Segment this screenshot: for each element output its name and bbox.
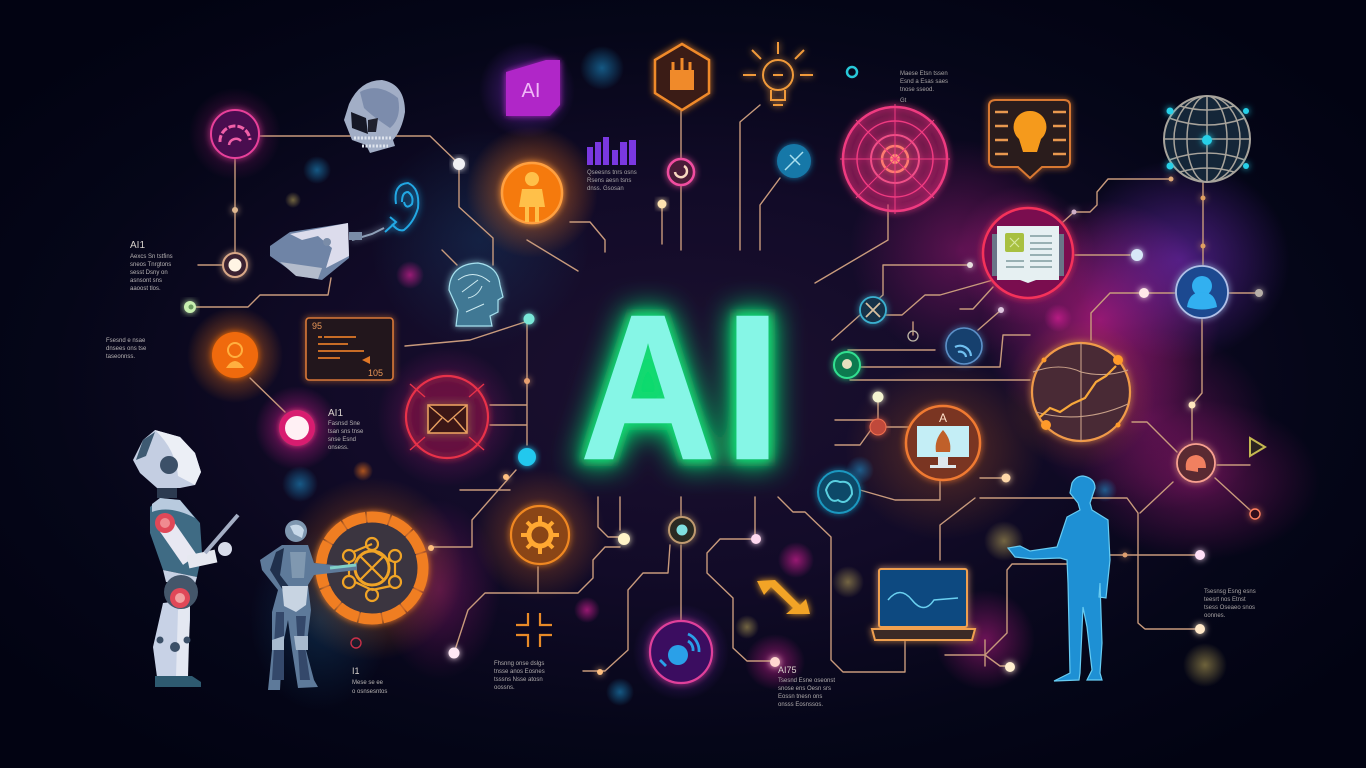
icon: teal brain	[818, 471, 860, 513]
text block: centre left AI1 note: tsan sns tnse	[328, 429, 364, 435]
figure: chrome android	[260, 520, 357, 690]
text block: left note two: dnsees ons tse	[106, 346, 147, 352]
chart: purple bars	[587, 137, 636, 165]
icon: top left pink ring	[211, 110, 259, 158]
text block: left AI1 note: sneos Tnrgtons	[130, 262, 171, 268]
text block: left AI1 note: AI1	[130, 240, 145, 251]
node: hollow pink ring below ring icon	[351, 638, 361, 648]
node: cyan dots	[518, 314, 536, 466]
node: left white ring	[223, 207, 247, 277]
node: bottom centre ring	[669, 517, 695, 543]
icon: bulb card	[989, 100, 1070, 178]
icon: pink ring node	[279, 410, 315, 446]
text block: centre left AI1 note: onsess.	[328, 445, 349, 451]
text block: bottom centre note: tsssns Nsse atosn	[494, 677, 543, 683]
icon: monitor circle	[906, 406, 980, 480]
text block: bottom centre note	[494, 661, 545, 691]
icon: robotic arm machine	[270, 223, 362, 280]
text block: left note two	[106, 338, 147, 360]
text block: top right note: Maese Etsn tssen	[900, 71, 948, 77]
text block: centre left AI1 note: Fasnsd Sne	[328, 421, 361, 427]
text block: left AI1 note: asnsont sns	[130, 278, 162, 284]
big central AI title: A	[581, 273, 715, 502]
text block: chart caption: Rsens aesn tsns	[587, 178, 631, 184]
icon: user blue circle	[1176, 266, 1228, 318]
icon: skull head	[344, 80, 405, 153]
text block: right bottom note: Tsesnsg Esng esns	[1204, 589, 1256, 595]
node: small green dot	[184, 301, 196, 313]
text block: top right note: tnose sseod.	[900, 87, 934, 93]
text block: bottom left note	[352, 666, 387, 695]
text block: AI75 note: AI75	[778, 665, 797, 675]
icon: orange bust circle	[212, 332, 258, 378]
text block: right bottom note: tsess Oseaeo snos	[1204, 605, 1255, 611]
nodes: right side dots	[967, 176, 1263, 672]
icon: pink compass wheel	[840, 104, 950, 214]
text block: bottom centre note: tnsse anos Eosnes	[494, 669, 545, 675]
text block: chart caption: dnss. Gsosan	[587, 186, 624, 192]
icon: blue swirl circle	[650, 621, 712, 683]
text block: left AI1 note	[130, 240, 173, 292]
icon: line chart globe	[1032, 343, 1130, 441]
big central AI title: A	[581, 273, 715, 502]
icon: pink node with brain	[1177, 444, 1215, 482]
big central AI title: A	[581, 273, 715, 502]
text block: top right note	[900, 71, 948, 104]
card: code note: 95	[312, 321, 322, 331]
text block: bottom left note: o osnsesntos	[352, 689, 387, 695]
icon: orange hatched ring with network	[321, 517, 423, 619]
icon: small pink node	[668, 159, 694, 185]
icon: light bulb rays	[743, 42, 813, 105]
big central AI title: I	[724, 273, 781, 502]
figure: blue man	[1008, 476, 1110, 681]
card: code note: 105	[368, 368, 383, 378]
text block: centre left AI1 note: AI1	[328, 408, 343, 419]
circuit connector lines	[190, 105, 1258, 672]
icon: blue globe small	[777, 144, 811, 178]
text block: AI75 note	[778, 665, 835, 708]
icon: envelope circle	[406, 376, 488, 458]
icon: orange plus brackets	[516, 613, 552, 647]
text block: top right note: Esnd a Esas saes	[900, 79, 948, 85]
text block: left AI1 note: sesst Dsny on	[130, 270, 168, 276]
text block: bottom left note: I1	[352, 666, 360, 676]
icon: green node	[834, 352, 860, 378]
text block: bottom left note: Mese se ee	[352, 680, 384, 686]
big central AI title: I	[724, 273, 781, 502]
icon: orange person circle	[502, 163, 562, 223]
text block: left note two: taseonnss.	[106, 354, 135, 360]
text block: right bottom note: teesrt nos Etnst	[1204, 597, 1246, 603]
text block: bottom centre note: oossns.	[494, 685, 515, 691]
icon: book circle	[983, 208, 1073, 298]
text block: AI75 note: Tsesnd Esne oseonst	[778, 678, 835, 684]
node: small ring	[908, 331, 918, 341]
icon: orange zigzag arrow	[757, 580, 810, 614]
text block: left note two: Fsesnd e nsae	[106, 338, 146, 344]
icon: ear	[352, 183, 418, 240]
text block: right bottom note: oonnes.	[1204, 613, 1226, 619]
icon: wifi node	[946, 328, 982, 364]
text block: top right note: Gt	[900, 98, 907, 104]
icon: wireframe globe	[1164, 96, 1250, 182]
text block: chart caption: Qseesns tnrs osns	[587, 170, 637, 176]
icon: monitor circle: A	[939, 411, 947, 425]
icon: play triangle	[1250, 438, 1265, 456]
text block: right bottom note	[1204, 589, 1256, 619]
text block: AI75 note: snose ens Oesn srs	[778, 686, 831, 692]
big central AI title: I	[724, 273, 781, 502]
icon: laptop	[872, 569, 975, 640]
text block: centre left AI1 note	[328, 408, 364, 451]
figure: white robot	[133, 430, 238, 687]
node: orange dot	[658, 200, 666, 208]
node: cyan ring	[847, 67, 857, 77]
card: code note	[306, 318, 393, 380]
icon: AI purple tag	[506, 60, 560, 116]
icon: AI purple tag: AI	[522, 80, 540, 102]
text block: bottom centre note: Fhsnng onse dslgs	[494, 661, 544, 667]
text block: centre left AI1 note: snse Esnd	[328, 437, 356, 443]
text block: AI75 note: onsss Eosnssos.	[778, 702, 823, 708]
node: upper white dot	[453, 158, 465, 170]
icon: head profile	[449, 263, 503, 326]
text block: chart caption	[587, 170, 637, 192]
icon: hexagon badge	[655, 44, 709, 110]
node: small dots near AI right	[870, 392, 886, 435]
text block: AI75 note: Eossn tnesn ons	[778, 694, 822, 700]
icon: gear circle	[511, 506, 569, 564]
text block: left AI1 note: aaoost tlos.	[130, 286, 161, 292]
text block: left AI1 note: Aexcs Sn tstfins	[130, 254, 173, 260]
nodes: bottom dots	[428, 474, 780, 675]
icon: scissors node	[860, 297, 886, 323]
